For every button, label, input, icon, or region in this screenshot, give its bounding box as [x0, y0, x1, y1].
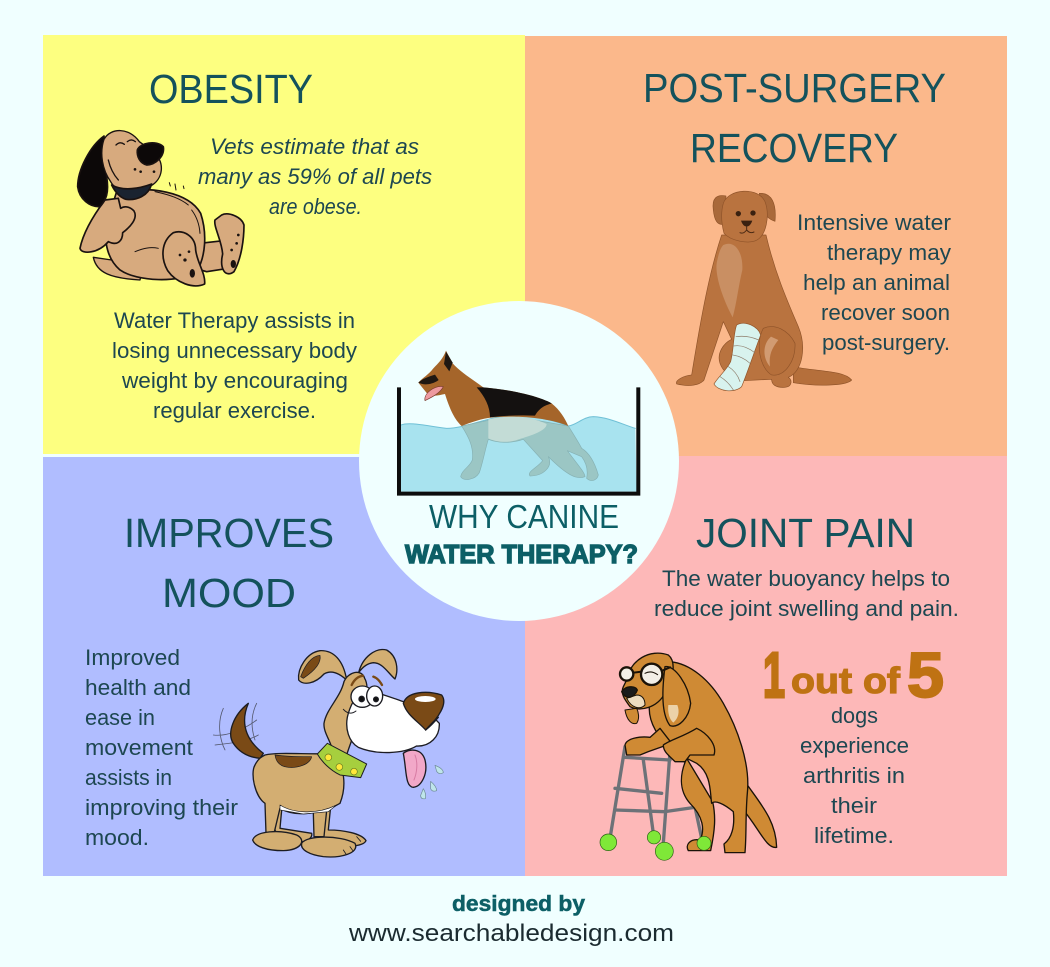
statistic: 1 out of 5: [763, 639, 944, 711]
panel: improves mood: [43, 457, 525, 876]
panel: obesity: [43, 35, 525, 454]
text block: arthritis: their: [831, 793, 877, 818]
text block: arthritis: experience: [800, 733, 909, 758]
heading: improves mood: MOOD: [162, 570, 296, 616]
icon: fat laughing dog: [78, 131, 244, 286]
text block: recovery: [797, 210, 951, 355]
text block: buoyancy: reduce joint swelling and pain.: [654, 596, 959, 621]
text block: vets estimate: [198, 134, 432, 219]
text block: arthritis: arthritis in: [803, 763, 905, 788]
text block: arthritis: lifetime.: [814, 823, 894, 848]
text block: recovery: help an animal: [803, 270, 950, 295]
text block: mood: movement: [85, 735, 193, 760]
statistic: 1 out of 5: 1: [763, 639, 785, 711]
text block: vets estimate: Vets estimate that as: [210, 134, 419, 159]
heading: improves mood: IMPROVES: [124, 510, 334, 556]
text block: mood: health and: [85, 675, 191, 700]
footer credit: www.searchabledesign.com: [348, 920, 674, 947]
text block: vets estimate: are obese.: [269, 194, 362, 219]
footer credit: designed by: [452, 891, 586, 916]
title: why canine water therapy: [405, 498, 638, 569]
title: why canine water therapy: WATER THERAPY?: [405, 539, 638, 569]
text block: mood: Improved: [85, 645, 180, 670]
statistic: 1 out of 5: 5: [907, 639, 944, 711]
footer credit: [348, 891, 674, 947]
panel: joint pain: [525, 456, 1007, 876]
icon: old dog with walker: [600, 653, 777, 860]
text block: mood: mood.: [85, 825, 149, 850]
panel: post-surgery recovery: [525, 36, 1007, 456]
text block: exercise: regular exercise.: [153, 398, 316, 423]
text block: mood: [85, 645, 238, 850]
title: why canine water therapy: WHY CANINE: [429, 498, 619, 535]
text block: buoyancy: The water buoyancy helps to: [662, 566, 950, 591]
heading: joint pain: JOINT PAIN: [696, 510, 915, 556]
text block: exercise: [112, 308, 357, 423]
icon: brown dog with bandaged leg: [676, 191, 852, 391]
text block: recovery: Intensive water: [797, 210, 951, 235]
text block: exercise: weight by encouraging: [121, 368, 348, 393]
illustration: german shepherd in water tank: [399, 351, 638, 494]
text block: recovery: recover soon: [821, 300, 950, 325]
text block: exercise: Water Therapy assists in: [114, 308, 355, 333]
text block: mood: ease in: [85, 705, 155, 730]
text block: buoyancy: [654, 566, 959, 621]
heading: improves mood: [124, 510, 334, 616]
statistic: 1 out of 5: out of: [791, 660, 901, 701]
text block: mood: assists in: [85, 765, 172, 790]
text block: exercise: losing unnecessary body: [112, 338, 357, 363]
center circle: why canine water therapy: [359, 301, 679, 621]
heading: post-surgery recovery: RECOVERY: [690, 125, 898, 171]
text block: mood: improving their: [85, 795, 238, 820]
text block: arthritis: [800, 703, 909, 848]
heading: post-surgery recovery: POST-SURGERY: [643, 65, 946, 111]
text block: recovery: therapy may: [827, 240, 951, 265]
text block: vets estimate: many as 59% of all pets: [198, 164, 432, 189]
text block: recovery: post-surgery.: [822, 330, 950, 355]
heading: post-surgery recovery: [643, 65, 946, 171]
heading: obesity: OBESITY: [149, 66, 313, 112]
text block: arthritis: dogs: [831, 703, 878, 728]
icon: happy dog with tongue out: [213, 650, 444, 857]
